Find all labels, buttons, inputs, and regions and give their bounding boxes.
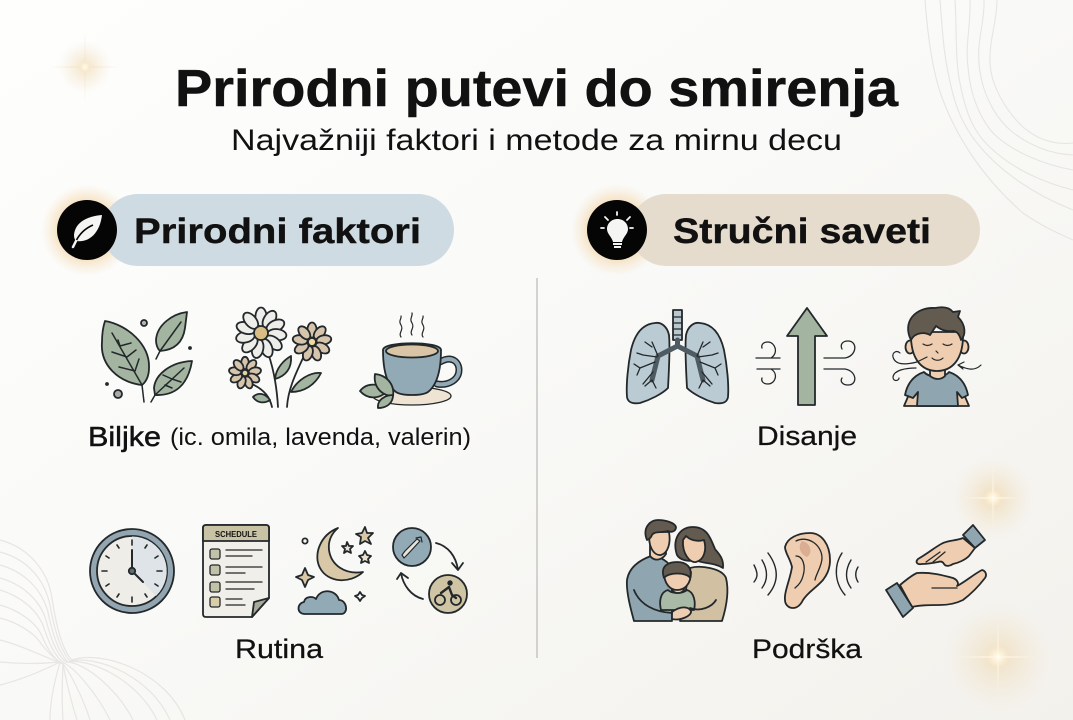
icon: leaf [73, 215, 102, 247]
label: Biljke: (ic. omila, lavenda, valerin) [170, 424, 471, 451]
header: Stručni saveti: Stručni saveti [673, 212, 931, 251]
icon: family [627, 520, 727, 621]
divider [536, 278, 538, 658]
icon: ear with sound waves [754, 533, 858, 608]
subtitle: Najvažniji faktori i metode za mirnu decu [231, 124, 842, 157]
sparkles: bottom right [943, 456, 1053, 712]
icon: clock [90, 529, 174, 613]
icon: herb leaves [102, 312, 192, 402]
icon: upward arrow with wind [756, 308, 855, 405]
label: Biljke: Biljke [88, 421, 161, 452]
header: Stručni saveti [571, 184, 980, 276]
decorative contour lines: bottom left [0, 540, 185, 720]
label: Rutina: Rutina [235, 634, 324, 664]
icon: hands [886, 525, 986, 617]
label: Podrška: Podrška [752, 634, 863, 664]
icon: moon, stars, cloud [296, 527, 373, 614]
icon: chamomile flowers [228, 308, 332, 407]
icon: light bulb [601, 212, 633, 248]
sparkle: top left [50, 32, 120, 102]
label: Biljke [88, 421, 471, 452]
decorative contour lines: top right [925, 0, 1073, 240]
header: Prirodni faktori [41, 184, 454, 276]
icon: lungs [627, 310, 728, 403]
icon: activity cycle [393, 528, 467, 613]
icon: schedule: SCHEDULE [215, 529, 257, 539]
icon: schedule [203, 525, 269, 617]
icon: breathing boy [893, 307, 981, 406]
icon: tea cup [360, 313, 459, 408]
header: Prirodni faktori: Prirodni faktori [134, 212, 421, 251]
title: Prirodni putevi do smirenja [175, 60, 899, 118]
label: Disanje: Disanje [757, 421, 857, 451]
